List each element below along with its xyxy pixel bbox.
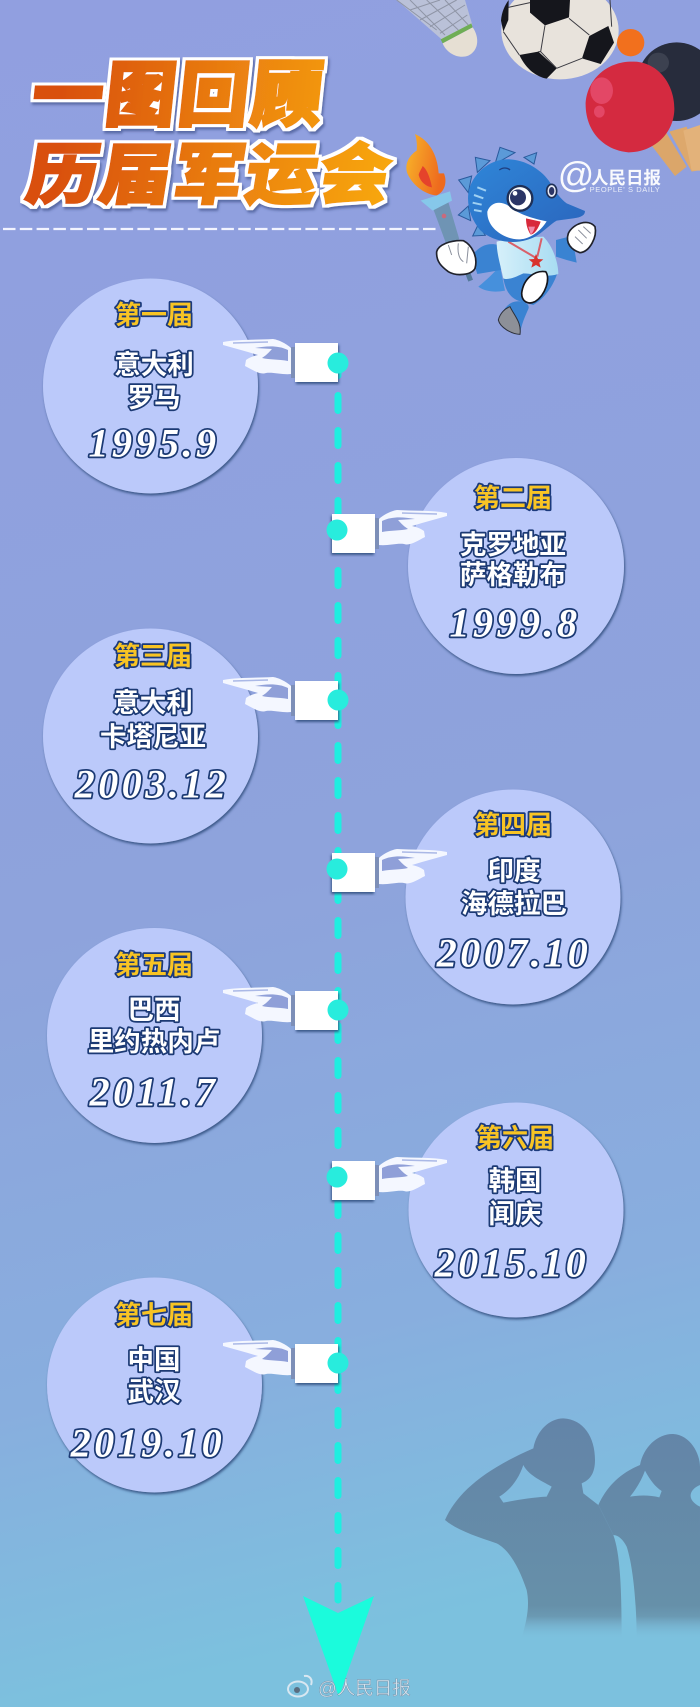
host city: 闻庆 (488, 1199, 542, 1229)
date: 2019.10 (70, 1420, 225, 1466)
icon: black paddle (637, 42, 700, 172)
mascot: tail (498, 301, 529, 334)
host city: 海德拉巴 (461, 889, 567, 919)
icon: football (501, 0, 619, 79)
title line 2: 历届军运会 (21, 121, 401, 217)
watermark: weibo credit (288, 1676, 411, 1698)
icon: weibo (288, 1676, 312, 1696)
mascot: right hand (567, 222, 595, 253)
pointing hand (223, 1340, 338, 1383)
circle (408, 458, 624, 674)
credit text: @人民日报 (318, 1678, 411, 1698)
date: 1995.9 (88, 420, 220, 466)
host country: 中国 (128, 1345, 180, 1375)
timeline dot (326, 520, 348, 540)
event 6 (326, 1102, 624, 1318)
logo name: 人民日报 (591, 168, 661, 188)
edition label: 第四届 (474, 810, 552, 840)
pointing hand (332, 849, 447, 892)
timeline dot (328, 690, 348, 710)
mascot: torch flame (406, 134, 445, 195)
pointing hand (223, 987, 338, 1030)
mascot: left hand (437, 241, 476, 275)
timeline dot (326, 1166, 348, 1188)
pointing hand (332, 1157, 447, 1200)
date: 2007.10 (436, 930, 591, 976)
circle (43, 278, 258, 494)
soldier rear (598, 1434, 700, 1638)
pointing hand (223, 677, 338, 720)
event 4 (326, 790, 620, 1004)
circle (406, 790, 620, 1004)
host city: 罗马 (128, 383, 180, 413)
date: 2015.10 (434, 1240, 589, 1286)
icon: orange ping-pong ball (617, 29, 644, 56)
icon: shuttlecock (397, 0, 477, 57)
host city: 武汉 (128, 1377, 180, 1407)
edition label: 第六届 (476, 1123, 554, 1153)
watermark: People's Daily logo (558, 154, 661, 195)
host city: 卡塔尼亚 (100, 722, 206, 752)
circle (408, 1102, 624, 1318)
host city: 里约热内卢 (88, 1027, 220, 1057)
logo at sign: @ (558, 154, 594, 195)
mascot: body (472, 236, 577, 305)
logo english: PEOPLE' S DAILY (590, 185, 660, 194)
illustration: sports equipment (397, 0, 700, 176)
soldier front (445, 1418, 622, 1638)
silhouette: saluting soldiers (445, 1418, 700, 1638)
host country: 克罗地亚 (460, 530, 566, 560)
edition label: 第七届 (115, 1300, 193, 1330)
event 7 (47, 1278, 348, 1492)
arrow head (303, 1596, 374, 1697)
host country: 意大利 (113, 688, 193, 718)
edition label: 第五届 (115, 950, 193, 980)
timeline dot (328, 1000, 348, 1020)
timeline dot (326, 858, 348, 880)
host city: 萨格勒布 (460, 560, 566, 590)
mascot: raised knee (522, 271, 548, 303)
mascot: back spikes (458, 147, 537, 236)
illustration: mascot with torch (406, 134, 595, 334)
title line 1: 一图回顾 (28, 37, 331, 141)
host country: 印度 (488, 856, 540, 886)
timeline dot (328, 352, 348, 374)
title (21, 37, 401, 217)
date: 2003.12 (74, 762, 229, 806)
date: 2011.7 (89, 1070, 218, 1114)
edition label: 第一届 (115, 300, 193, 330)
mascot: head (468, 159, 585, 242)
icon: red paddle (586, 62, 687, 176)
circle (43, 628, 258, 844)
host country: 意大利 (114, 350, 194, 380)
event 1 (43, 278, 348, 494)
event 2 (326, 458, 624, 674)
edition label: 第三届 (114, 641, 192, 671)
pointing hand (223, 339, 338, 382)
circle (47, 1278, 262, 1492)
host country: 韩国 (488, 1166, 542, 1196)
date: 1999.8 (450, 600, 580, 646)
host country: 巴西 (128, 995, 180, 1025)
edition label: 第二届 (474, 483, 552, 513)
pointing hand (332, 510, 447, 553)
event 3 (43, 628, 348, 844)
timeline: dashed vertical line (334, 360, 342, 1600)
mascot: torch (421, 191, 471, 281)
circle (47, 928, 262, 1143)
event 5 (47, 928, 348, 1143)
divider: dashed line under title (3, 228, 436, 230)
timeline dot (328, 1352, 348, 1374)
